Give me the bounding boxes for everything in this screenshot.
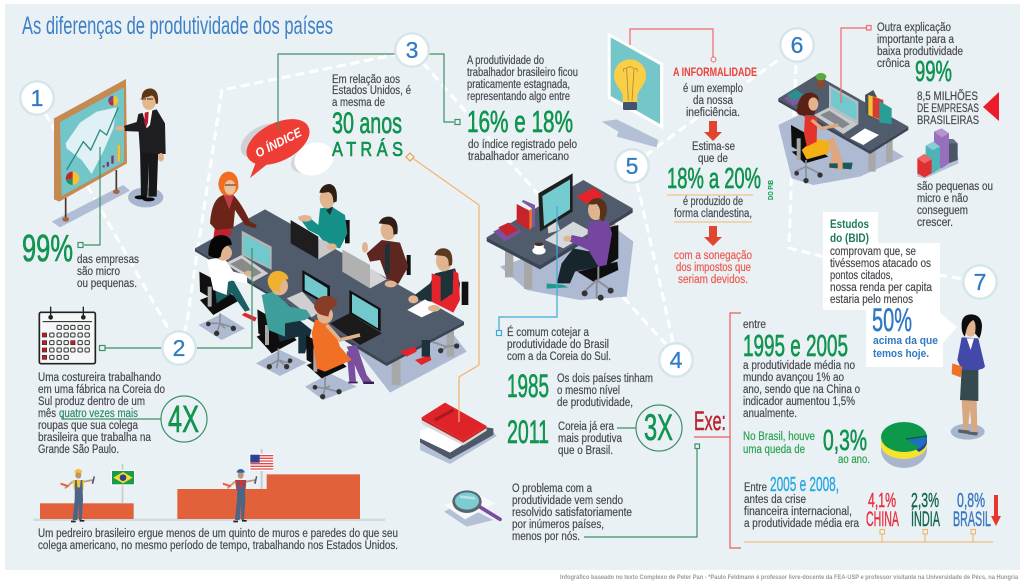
person: man in maroon jacket [362,217,411,287]
text: Brazil vs South Korea: 2011 [507,414,549,450]
stat: China [866,490,899,531]
text block: 1995 to 2005: indicador aumentou 1,5% [743,396,855,408]
text: comparison to United States: A T R Á S [332,138,403,161]
text: Brazilian worker productivity: A produtividade do [467,55,544,67]
text block: 8.5 million companies [877,22,993,229]
step marker 4: 4 [670,347,683,373]
stat: 99% of companies: das empresas [77,254,139,266]
connector: to Outra explicação [841,26,871,103]
stat: Brazil 0.3% fall [743,425,870,466]
text block: informality: DO PIB [766,180,775,200]
text block: 1995 to 2005: 1995 e 2005 [743,328,848,363]
step marker 5 [614,148,650,184]
step marker 1: 1 [31,85,43,111]
step marker 7 [962,264,998,300]
illustration: walls, builders and flags [33,449,385,522]
laptop: black [291,220,337,259]
text: Brazil vs South Korea: de produtividade, [557,397,633,409]
text block: informality: é um exemplo [683,83,743,95]
text block: 2005 to 2008: 2005 e 2008, [770,474,839,496]
connector: 99% [78,147,100,248]
text block: 8.5 million companies: 8,5 MILHÕES [917,90,978,103]
illustration: stack of books [420,403,497,464]
text block: 1995 to 2005: entre [743,319,766,331]
text block: 8.5 million companies: importante para a [877,34,955,46]
text block: informality: dos impostos que [676,262,751,274]
person: woman in white shirt at teal laptop [199,231,272,336]
text: seamstress comparison: brasileira que trabalha na [38,432,152,444]
timeline baseline with markers [744,530,993,542]
step marker 5: 5 [626,153,638,179]
text: seamstress comparison: mês [38,408,56,420]
callout: Estudos do BID: tivéssemos atacado os [830,258,931,270]
text: Brazil vs South Korea: É comum cotejar a [507,326,590,339]
connector: step 2 lines [100,248,252,350]
text: comparison to United States [332,74,411,161]
illustration: presenter and map board [52,79,166,227]
text: Brazilian worker productivity: representando algo entre [467,91,570,103]
text: Brazil vs South Korea: Os dois países tinham [557,373,653,385]
callout: Estudos do BID: pontos citados, [830,270,893,282]
stat: India: 2,3% [911,490,939,512]
stat: Brazil [953,490,991,531]
stat: India: ÍNDIA [911,508,940,531]
step marker 3 [394,32,430,68]
callout: Estudos do BID: comprovam que, se [830,246,916,258]
text: seamstress comparison: em uma fábrica na Coreia do [38,384,165,396]
dashed route connecting numbered steps [45,54,964,344]
text: seamstress comparison: Uma costureira trabalhando [38,372,161,384]
text: the problem [512,444,700,543]
stat: Brazil 0.3% fall: uma queda de [743,444,805,456]
stat: Brazil 0.3% fall: ao ano. [838,454,870,466]
person: woman with orange hair [210,172,257,238]
step marker 6 [779,27,815,63]
illustration: desk with desktop computer [487,173,633,301]
text block: 8.5 million companies: 99% [915,56,952,88]
text block: 1995 to 2005: a produtividade média no [743,360,855,372]
text block: 8.5 million companies: são pequenas ou [917,181,993,193]
speech bubbles: O ÍNDICE: O ÍNDICE [253,124,304,160]
text block: 8.5 million companies: Outra explicação [877,22,951,34]
figure: Brazilian builder [60,469,95,522]
text: the problem: menos por nós. [512,531,580,543]
text block: 8.5 million companies: BRASILEIRAS [917,115,979,127]
text block: informality: que de [698,153,728,165]
text block: 2005 to 2008: a produtividade média era [744,518,860,530]
text block: 8.5 million companies: micro e não [917,193,968,205]
arrow: Brazil down [991,495,1001,526]
text: Brazilian worker productivity: 16% e 18% [467,104,573,139]
stat: 99% of companies: ou pequenas. [77,278,137,290]
text block: informality: seriam devidos. [678,274,748,286]
connector: step 3 lines [278,54,454,130]
text: bricklayer comparison: colega americano, no mesmo período de tempo, trabalhando nos Estados Unidos. [38,540,398,552]
text block: 2005 to 2008 [744,474,860,530]
badge: 4X: 4X [168,399,199,441]
text block: informality: com a sonegação [674,250,752,262]
icon: magnifier [444,490,500,527]
stat: Brazil 0.3% fall: 0,3% [823,425,867,457]
text block: 8.5 million companies: crescer. [917,217,953,229]
figure: American builder [223,469,257,522]
text: comparison to United States: Em relação aos [332,74,400,86]
text: seamstress comparison [38,372,165,456]
heading: Exe bracket: Exe: [694,406,726,436]
text: seamstress comparison: quatro vezes mais [59,408,138,420]
text: comparison to United States: 30 anos [332,107,402,140]
text block: 1995 to 2005: anualmente. [743,408,797,420]
connector: red line to A INFORMALIDADE [630,29,716,62]
text block: 1995 to 2005: mundo avançou 1% ao [743,372,844,384]
text: comparison to United States: Estados Unidos, é [332,85,411,97]
laptop: grey [342,249,387,288]
text: Brazil vs South Korea: que o Brasil. [558,445,613,457]
text block: informality: Estima-se [692,141,735,153]
step marker 2 [161,330,197,366]
stat: Brazil 0.3% fall: No Brasil, houve [743,431,815,443]
text: bricklayer comparison: Um pedreiro brasileiro ergue menos de um quinto de muros e paredes do que seu [38,528,398,540]
step marker 1 [19,80,55,116]
badge: 3X [617,405,682,451]
text: seamstress comparison: Grande São Paulo. [38,444,119,456]
text: Brazilian worker productivity: trabalhador americano [468,151,569,163]
text block: 1995 to 2005: ano, sendo que na China o [743,384,860,396]
text: Brazilian worker productivity: do índice registrado pelo [468,139,577,151]
text: Brazil vs South Korea: Coreia já era [558,421,615,433]
text block: informality: forma clandestina, [674,208,752,220]
stat: Brazil: 0,8% [957,490,985,512]
connector square: 16% [455,120,460,124]
connector: orange line from ATRÁS to books [406,153,479,422]
stat: China: 4,1% [868,490,896,512]
text: seamstress comparison: roupas que sua colega [38,420,139,432]
step marker 2: 2 [173,335,185,361]
text: the problem: O problema com a [512,483,592,495]
arrow: down [704,121,722,141]
text: bricklayer comparison [38,528,398,552]
illustration: woman at laptop desk [778,73,908,185]
text block: informality: ineficiência. [686,107,740,119]
badge: 4X [62,396,207,442]
callout: Estudos do BID: temos hoje. [873,348,929,360]
title: As diferenças de produtividade dos países [22,12,333,40]
text block: 8.5 million companies: baixa produtividade [877,46,963,58]
callout: Estudos do BID: nossa renda per capita [830,282,933,294]
stat: India [911,490,940,531]
text: Brazilian worker productivity: trabalhador brasileiro ficou [467,67,578,79]
heading: Exe bracket [694,313,741,548]
illustration: monitor with light bulb [602,33,663,147]
text: Brazil vs South Korea [507,326,653,457]
chart: 3D pie [881,422,927,468]
person: woman in orange dress [306,290,382,399]
icon: red triangle [983,92,999,121]
text: Brazil vs South Korea: o mesmo nível [557,385,620,397]
text block: informality [667,67,775,286]
stat: 99% of companies [22,228,139,290]
text block: 2005 to 2008: antes da crise [744,494,806,506]
text block: 1995 to 2005 [743,319,860,420]
text block: 2005 to 2008: Entre [744,482,767,494]
illustration: businesswoman [951,314,985,440]
callout: Estudos do BID: acima da que [873,335,938,347]
text block: informality: é produzido de [683,196,743,208]
illustration: team around meeting table [195,172,468,400]
text: Brazilian worker productivity: praticamente estagnada, [467,79,570,91]
text: Brazil vs South Korea: produtividade do Brasil [507,339,609,351]
text: Brazil vs South Korea: com a da Coreia do Sul. [507,351,611,363]
text: comparison to United States: a mesma de [332,97,385,109]
text: seamstress comparison: Sul produz dentro de um [38,396,145,408]
person: blond man in teal hoodie [257,270,330,369]
stat: 99% of companies: são micro [77,266,120,278]
text block: informality: 18% a 20% [667,163,761,195]
speech bubbles: O ÍNDICE [235,110,338,181]
callout: Estudos do BID [823,212,957,367]
callout: Estudos do BID: estaria pelo menos [830,294,913,306]
callout: Estudos do BID: Estudos [830,217,869,231]
arrow: down to tax evasion [704,226,722,246]
callout: Estudos do BID: 50% [872,302,912,338]
person: man in teal sweater [298,184,350,248]
text: the problem: por inúmeros países, [512,519,604,531]
badge: 3X: 3X [644,407,673,448]
text block: 8.5 million companies: crônica [877,58,911,70]
text: the problem: produtividade vem sendo [512,495,623,507]
stat: China: CHINA [866,508,899,531]
person: man with red vest and paper [400,248,468,365]
text block: informality: A INFORMALIDADE [673,67,757,79]
stat: 99% of companies: 99% [22,228,73,270]
step marker 3: 3 [406,37,418,63]
text block: informality: da nossa [693,95,734,107]
text: Brazilian worker productivity [467,55,578,163]
text block: 2005 to 2008: financeira internacional, [744,506,852,518]
callout: Estudos do BID: do (BID) [830,231,869,245]
icon: 3D bar chart [917,128,958,178]
text block: 8.5 million companies: DE EMPRESAS [917,103,979,115]
step marker 7: 7 [974,269,986,295]
text: the problem: resolvido satisfatoriamente [512,507,632,519]
step marker 6: 6 [791,32,803,58]
connector: blue line to Coreia text [496,206,557,336]
text: Brazil vs South Korea: mais produtiva [558,433,623,445]
text: Brazil vs South Korea: 1985 [507,368,549,404]
step marker 4 [658,342,694,378]
text block: 8.5 million companies: conseguem [917,205,968,217]
icon: calendar [39,307,95,364]
